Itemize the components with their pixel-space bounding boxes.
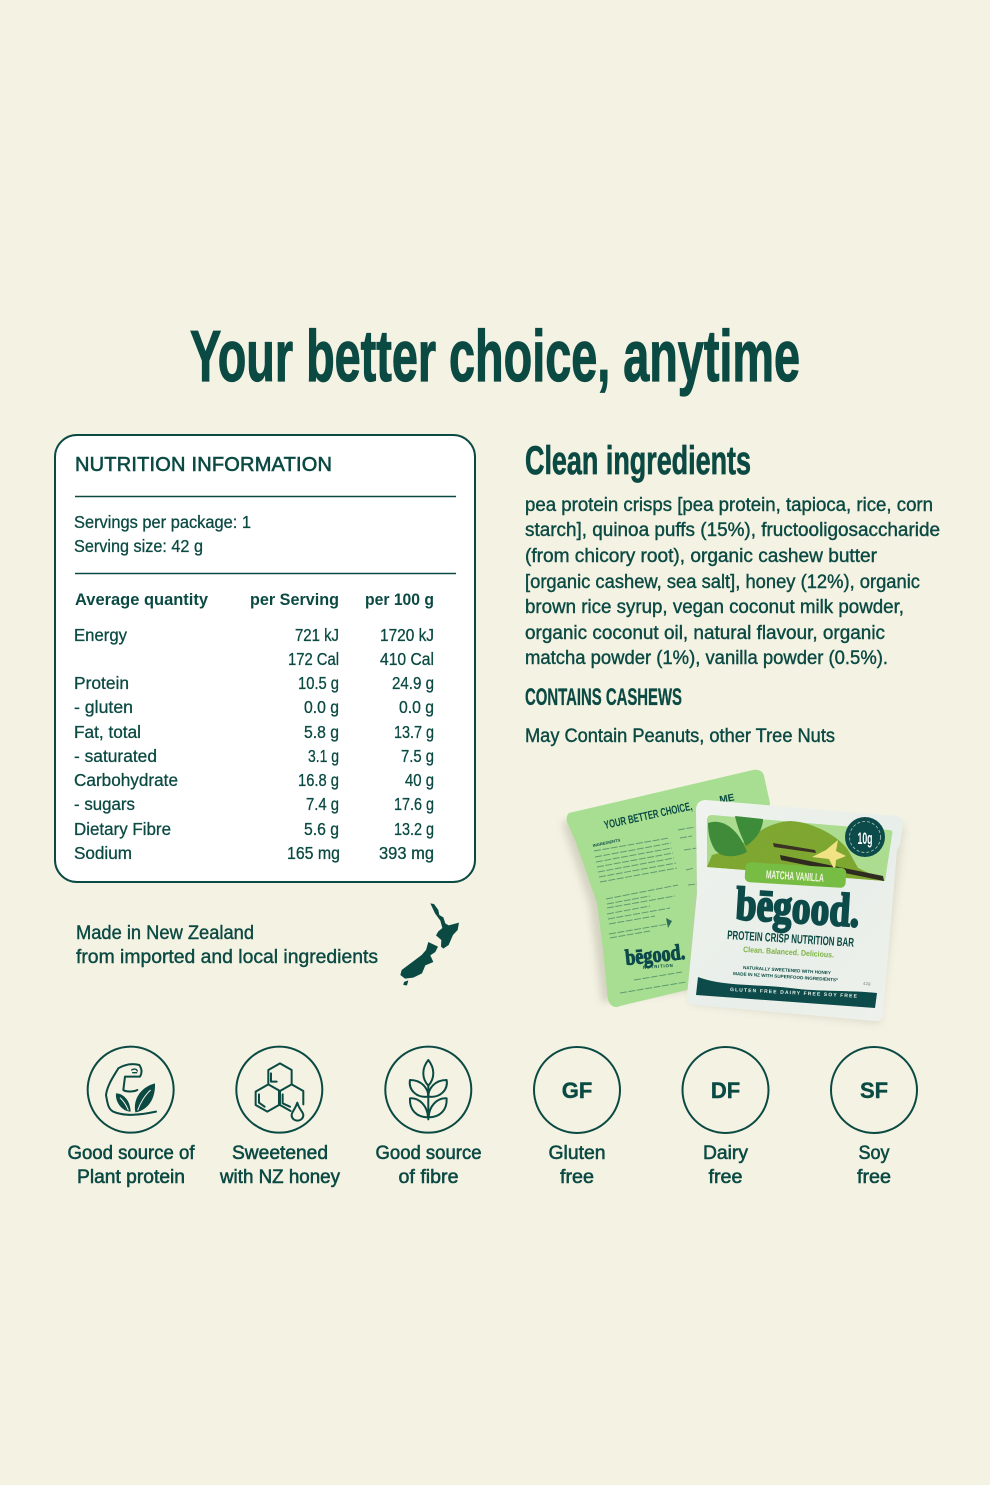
ingredients text: [organic cashew, sea salt], honey (12%), organic [525, 572, 920, 593]
nutrition rows: - saturated [74, 746, 157, 766]
ingredients text: matcha powder (1%), vanilla powder (0.5%). [525, 648, 888, 669]
label: free [560, 1167, 594, 1188]
nutrition rows: 24.9 g [392, 673, 434, 693]
pack logo: bēgood. [734, 878, 861, 938]
benefit: dairy free [682, 1047, 768, 1188]
ingredients text: organic coconut oil, natural flavour, organic [525, 623, 885, 644]
nutrition rows: 1720 kJ [380, 625, 434, 645]
nutrition rows: 7.5 g [401, 746, 434, 766]
allergen heading: CONTAINS CASHEWS [525, 684, 682, 711]
label: Good source [376, 1143, 482, 1164]
nutrition rows: - sugars [74, 794, 135, 814]
nutrition heading: NUTRITION INFORMATION [75, 454, 332, 476]
benefit: fibre [376, 1047, 482, 1188]
flavour pill: MATCHA VANILLA [766, 869, 824, 885]
ingredients text: brown rice syrup, vegan coconut milk powder, [525, 597, 904, 618]
front pack: MADE IN NZ WITH SUPERFOOD INGREDIENTS* [733, 971, 838, 982]
label [857, 1143, 891, 1188]
benefit: soy free [831, 1047, 917, 1188]
icon: honeycomb [236, 1047, 322, 1133]
label: Plant protein [77, 1167, 185, 1188]
nutrition rows: Energy [74, 625, 127, 645]
label [219, 1143, 340, 1188]
benefit: NZ honey [219, 1047, 340, 1188]
label: Dairy [703, 1143, 748, 1164]
nutrition rows: 172 Cal [288, 649, 339, 669]
icon: GF: GF [562, 1078, 592, 1103]
front pack: NATURALLY SWEETENED WITH HONEY [743, 965, 831, 975]
nutrition rows: Carbohydrate [74, 770, 178, 790]
icon: GF [534, 1047, 620, 1133]
nutrition rows: 5.6 g [304, 819, 339, 839]
back pack: NUTRITION [643, 963, 673, 970]
label [376, 1143, 482, 1188]
label: with NZ honey [219, 1167, 340, 1188]
icon: DF: DF [711, 1078, 740, 1103]
ingredients text [525, 495, 940, 669]
pack footer band: GLUTEN FREE DAIRY FREE SOY FREE [730, 987, 858, 1000]
front pack [687, 800, 905, 1024]
nutrition rows: 410 Cal [380, 649, 434, 669]
label: Gluten [548, 1143, 606, 1164]
back pack: YOUR BETTER CHOICE, [603, 801, 694, 832]
back pack: INGREDIENTS [592, 838, 621, 848]
label: free [708, 1167, 742, 1188]
nutrition rows [74, 625, 434, 863]
pack footer band [696, 977, 877, 1008]
nutrition rows: 13.7 g [394, 722, 434, 742]
table header: per Serving [250, 590, 339, 609]
nutrition rows: Dietary Fibre [74, 819, 171, 839]
icon: SF: SF [860, 1078, 888, 1103]
nutrition rows: 10.5 g [298, 673, 339, 693]
benefit: plant protein [68, 1047, 195, 1188]
label [68, 1143, 195, 1188]
icon: muscle and leaves [88, 1047, 174, 1133]
label: of fibre [398, 1167, 458, 1188]
nutrition rows: 721 kJ [295, 625, 339, 645]
made in New Zealand text: Made in New Zealand [76, 923, 254, 944]
back pack logo: bēgood. [624, 939, 686, 970]
label: Good source of [68, 1143, 195, 1164]
nutrition rows: 17.6 g [394, 794, 434, 814]
icon row [68, 1047, 917, 1188]
table header [75, 590, 434, 609]
pack illustration band [707, 815, 892, 881]
ingredients text: (from chicory root), organic cashew butter [525, 546, 878, 567]
serving information: Servings per package: 1 [74, 512, 251, 532]
label: Sweetened [232, 1143, 328, 1164]
nutrition rows: 0.0 g [399, 697, 434, 717]
icon: wheat [385, 1047, 471, 1133]
nutrition rows: 393 mg [379, 843, 434, 863]
nutrition rows: 165 mg [287, 843, 340, 863]
nutrition rows: 5.8 g [304, 722, 339, 742]
nutrition rows: 0.0 g [304, 697, 339, 717]
product image: two packs [562, 770, 905, 1024]
made in New Zealand text [76, 923, 378, 968]
protein badge [845, 817, 885, 857]
nutrition rows: 3.1 g [308, 746, 339, 766]
panel: nutrition information [55, 435, 475, 882]
icon: DF [682, 1047, 768, 1133]
serving information [74, 512, 251, 556]
allergen note: May Contain Peanuts, other Tree Nuts [525, 726, 835, 747]
nutrition rows: Protein [74, 673, 129, 693]
pack subtitle: PROTEIN CRISP NUTRITION BAR [727, 928, 854, 950]
ingredients text: pea protein crisps [pea protein, tapioca, rice, corn [525, 495, 933, 516]
table header: Average quantity [75, 590, 209, 609]
label [548, 1143, 606, 1188]
nutrition rows: 40 g [405, 770, 434, 790]
heading: clean ingredients: Clean ingredients [525, 439, 751, 483]
icon: SF [831, 1047, 917, 1133]
benefit: gluten free [534, 1047, 620, 1188]
table header: per 100 g [365, 590, 434, 609]
nutrition rows: Fat, total [74, 722, 141, 742]
nutrition rows: Sodium [74, 843, 132, 863]
label [703, 1143, 748, 1188]
made in New Zealand text: from imported and local ingredients [76, 947, 378, 968]
ingredients text: starch], quinoa puffs (15%), fructooligosaccharide [525, 520, 940, 541]
front pack: 42g [863, 981, 871, 986]
serving information: Serving size: 42 g [74, 536, 203, 556]
nutrition rows: - gluten [74, 697, 133, 717]
nutrition rows: 16.8 g [298, 770, 339, 790]
back pack: ME [719, 792, 736, 806]
nutrition rows: 13.2 g [394, 819, 434, 839]
nutrition rows: 7.4 g [306, 794, 339, 814]
back pack [562, 770, 770, 1007]
protein badge: 10g [858, 829, 872, 848]
label: free [857, 1167, 891, 1188]
label: Soy [858, 1143, 890, 1164]
flavour pill [744, 862, 847, 888]
pack tagline: Clean. Balanced. Delicious. [743, 945, 834, 960]
icon: New Zealand map [400, 903, 459, 985]
